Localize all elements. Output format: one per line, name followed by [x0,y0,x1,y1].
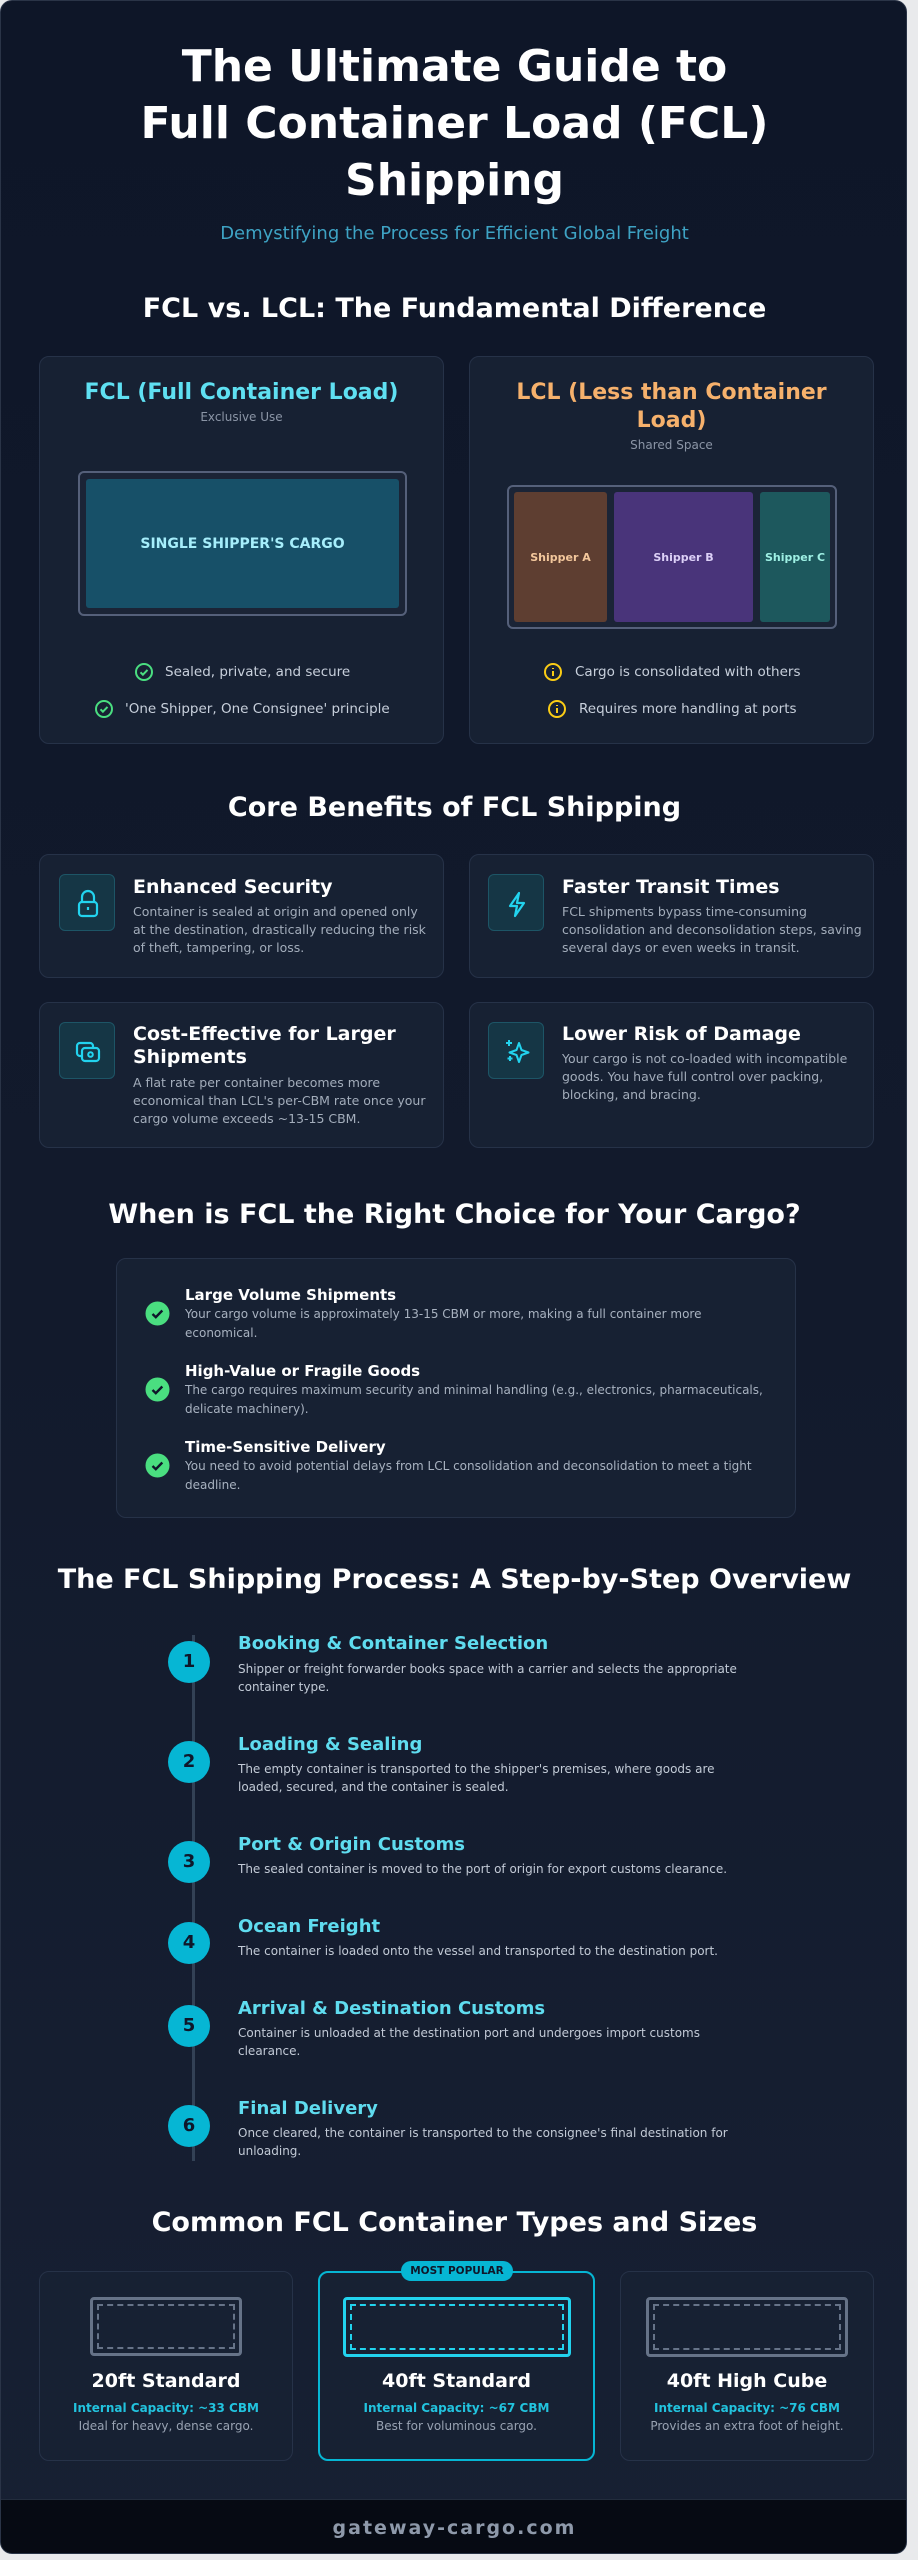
panel: lower risk [469,1002,874,1148]
step 6: Final Delivery [238,2098,378,2119]
title: The Ultimate Guide to [182,41,727,92]
card: 40ft standard: Internal Capacity: ~67 CBM [364,2401,549,2415]
text [133,1023,426,1126]
LCL container diagram: Shipper C [765,550,825,564]
card: 40ft high cube: 40ft High Cube [667,2370,827,2392]
LCL container diagram: Shipper A [530,550,591,564]
item 2: High-Value or Fragile Goods [185,1362,420,1380]
card: 40ft standard [318,2271,595,2461]
LCL bullet 2: Requires more handling at ports [579,701,797,717]
panel: faster transit [469,854,874,978]
text: Your cargo is not co-loaded with incompatible goods. You have full control over packing, blocking, and bracing. [562,1051,847,1102]
heading: core benefits: Core Benefits of FCL Shipping [228,792,681,823]
FCL title: FCL (Full Container Load) [85,380,398,405]
FCL bullet 1: Sealed, private, and secure [165,664,350,680]
step 5: 5 [183,2015,195,2036]
item 1 [146,1286,701,1340]
icon: container 40ft [343,2297,571,2357]
item 3 [146,1438,752,1492]
card: 20ft: Ideal for heavy, dense cargo. [79,2419,253,2433]
icon: lightning [488,874,544,931]
heading: process: The FCL Shipping Process: A Step-by-Step Overview [58,1564,851,1595]
heading: when is FCL right: When is FCL the Right Choice for Your Cargo? [108,1199,801,1230]
timeline [192,1635,195,2161]
card: 20ft [39,2271,293,2461]
text: Faster Transit Times [562,876,780,898]
step 4 [168,1916,718,1964]
step 6: 6 [183,2115,195,2136]
step 1: 1 [183,1651,195,1672]
text: FCL shipments bypass time-consuming consolidation and deconsolidation steps, saving several days or even weeks in transit. [562,904,862,955]
heading: FCL vs LCL: FCL vs. LCL: The Fundamental Difference [143,293,766,324]
card: 40ft high cube: Internal Capacity: ~76 CBM [654,2401,840,2415]
step 1 [168,1633,737,1694]
card: 20ft: Internal Capacity: ~33 CBM [73,2401,259,2415]
step 6 [168,2098,728,2158]
item 2: The cargo requires maximum security and minimal handling (e.g., electronics, pharmaceuticals, [185,1383,763,1397]
LCL title [516,380,827,433]
step 5: Arrival & Destination Customs [238,1998,545,2019]
step 4: 4 [183,1932,195,1953]
step 3: 3 [183,1851,195,1872]
step 3 [168,1834,727,1883]
step 4: The container is loaded onto the vessel and transported to the destination port. [238,1944,718,1958]
item 1: Large Volume Shipments [185,1286,396,1304]
card: 20ft: 20ft Standard [92,2370,240,2392]
item 1: economical. [185,1326,257,1340]
badge [401,2261,513,2281]
text [562,876,862,955]
LCL container diagram [507,485,837,629]
panel: enhanced security [39,854,444,978]
LCL container diagram: Shipper B [653,550,714,564]
title: Shipping [345,155,564,206]
text: A flat rate per container becomes more economical than LCL's per-CBM rate once your cargo volume exceeds ~13-15 CBM. [133,1075,425,1126]
icon: container high cube [646,2297,848,2357]
FCL subtitle: Exclusive Use [200,410,283,424]
item 3: Time-Sensitive Delivery [185,1438,386,1456]
icon: lock [59,874,115,931]
step 1: Booking & Container Selection [238,1633,548,1654]
item 3: You need to avoid potential delays from LCL consolidation and deconsolidation to meet a tight [185,1459,752,1473]
step 4: Ocean Freight [238,1916,380,1937]
icon: sparkles [488,1022,544,1079]
card: 40ft high cube [620,2271,874,2461]
step 5: Container is unloaded at the destination port and undergoes import customs clearance. [238,2026,700,2058]
card: 40ft standard: 40ft Standard [382,2370,531,2392]
step 1: Shipper or freight forwarder books space with a carrier and selects the appropriate container type. [238,1662,737,1694]
footer: gateway-cargo.com [333,2517,576,2539]
title [141,41,768,206]
text: Lower Risk of Damage [562,1023,801,1045]
card: 40ft standard: Best for voluminous cargo. [376,2419,537,2433]
step 3: The sealed container is moved to the port of origin for export customs clearance. [238,1862,727,1876]
heading: container types: Common FCL Container Types and Sizes [152,2207,757,2238]
step 2: The empty container is transported to the shipper's premises, where goods are loaded, secured, and the container is sealed. [238,1762,715,1794]
text [133,876,426,955]
item 1: Your cargo volume is approximately 13-15 CBM or more, making a full container more [185,1307,701,1321]
card: 40ft high cube: Provides an extra foot of height. [650,2419,844,2433]
item 2 [146,1362,763,1416]
step 2 [168,1734,715,1794]
FCL container diagram [78,471,407,616]
item 3: deadline. [185,1478,240,1492]
subtitle: Demystifying the Process for Efficient Global Freight [220,223,689,244]
LCL bullet 1: Cargo is consolidated with others [575,664,800,680]
icon: cash [59,1022,115,1079]
text: Cost-Effective for Larger Shipments [133,1023,396,1068]
FCL bullet 2: 'One Shipper, One Consignee' principle [125,701,390,717]
icon: container 20ft [90,2297,242,2356]
panel: FCL [39,356,444,744]
step 2: Loading & Sealing [238,1734,422,1755]
LCL title: LCL (Less than Container [516,380,827,405]
panel: LCL [469,356,874,744]
panel: cost effective [39,1002,444,1148]
LCL subtitle: Shared Space [630,438,713,452]
title: Full Container Load (FCL) [141,98,768,149]
panel: checklist [116,1258,796,1518]
step 3: Port & Origin Customs [238,1834,465,1855]
text [562,1023,847,1102]
badge: MOST POPULAR [410,2265,504,2277]
item 2: delicate machinery). [185,1402,309,1416]
LCL title: Load) [637,408,706,433]
FCL container diagram: SINGLE SHIPPER'S CARGO [140,536,345,552]
step 6: Once cleared, the container is transported to the consignee's final destination for unloading. [238,2126,728,2158]
step 2: 2 [183,1751,195,1772]
step 5 [168,1998,700,2058]
footer [1,2499,908,2557]
text: Enhanced Security [133,876,332,898]
text: Container is sealed at origin and opened only at the destination, drastically reducing the risk of theft, tampering, or loss. [133,904,426,955]
